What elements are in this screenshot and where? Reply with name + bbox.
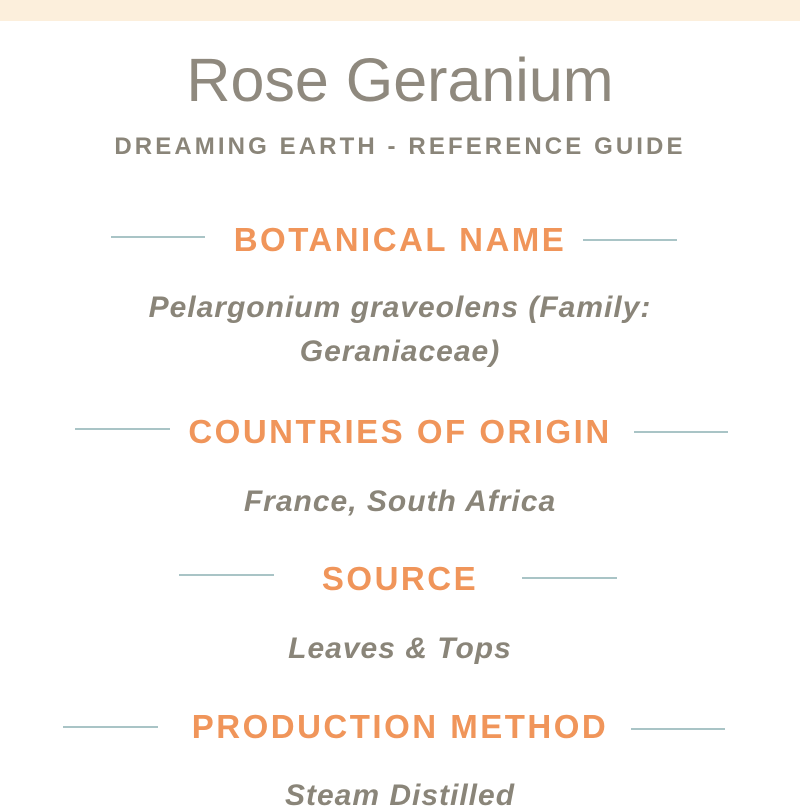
subtitle: DREAMING EARTH - REFERENCE GUIDE <box>114 133 686 160</box>
heading: countries: COUNTRIES OF ORIGIN <box>188 413 612 450</box>
section: production method <box>63 708 725 812</box>
top band <box>0 0 800 21</box>
title: Rose Geranium <box>186 46 614 114</box>
text: botanical name: Pelargonium graveolens (Family: <box>149 291 651 324</box>
text: production method: Steam Distilled <box>285 779 515 812</box>
text: botanical name <box>149 291 651 368</box>
section: countries of origin <box>75 413 728 518</box>
text: countries: France, South Africa <box>244 485 556 518</box>
heading: production method: PRODUCTION METHOD <box>192 708 608 745</box>
heading: source: SOURCE <box>322 560 478 597</box>
section: botanical name <box>111 221 677 368</box>
text: source: Leaves & Tops <box>288 632 512 665</box>
heading: botanical name: BOTANICAL NAME <box>234 221 566 258</box>
section: source <box>179 560 617 665</box>
text: botanical name: Geraniaceae) <box>300 335 500 368</box>
